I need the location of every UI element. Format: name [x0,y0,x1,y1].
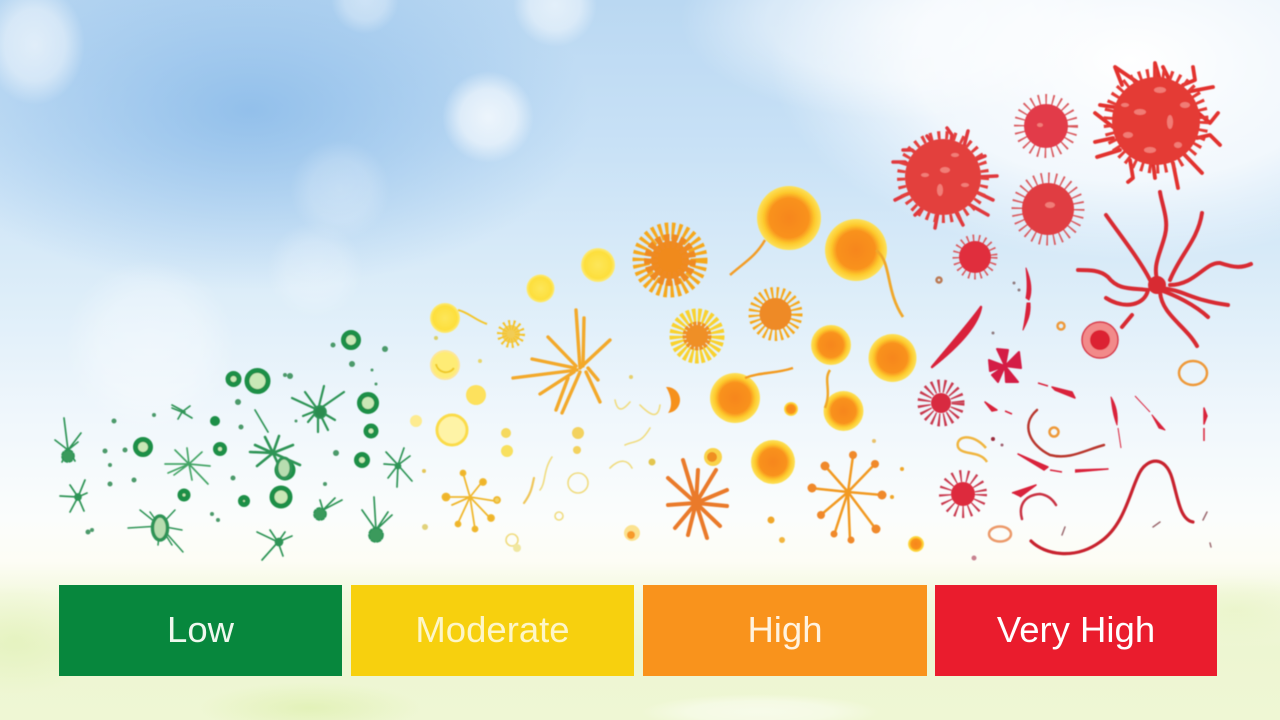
orange star cell [668,460,727,538]
green rings [136,332,376,506]
legend bar: high [643,585,927,676]
legend bar: moderate: Moderate [415,608,570,650]
faded orange ball [666,387,680,413]
yellow dandelion cell [442,470,500,532]
highlights on spiky cells [921,87,1190,208]
red blood cell [1082,322,1118,358]
green spiky cells [55,386,412,560]
red spindle bacilli [932,268,1207,497]
legend bar: very high: Very High [997,608,1155,650]
big red cell left [893,128,997,228]
red microbes: very high [893,63,1251,560]
orange spiky cells [641,231,796,356]
orange dandelion cell [808,451,886,544]
small yellow spiky cell [502,325,520,343]
green microbes: low [55,332,412,560]
star yellow cell [513,310,610,413]
yellow-red rings [936,278,1207,542]
green specks [86,342,388,534]
big red cell right [1095,63,1220,188]
tentacled red cell [1078,192,1251,346]
flower shaped cell [989,349,1021,382]
pale curly filaments [506,400,660,546]
legend bar: high: High [747,608,823,650]
yellow balls [410,248,615,457]
yellow microbes: moderate [410,248,722,552]
orange balls [710,186,924,552]
orange microbes: high [641,186,924,552]
legend bar: very high [935,585,1217,676]
legend bar: low: Low [167,608,234,650]
legend bar: low [59,585,342,676]
red spiky cells [924,101,1077,512]
all microbes [55,63,1251,560]
red worms [1021,410,1211,554]
legend bar: moderate [351,585,634,676]
